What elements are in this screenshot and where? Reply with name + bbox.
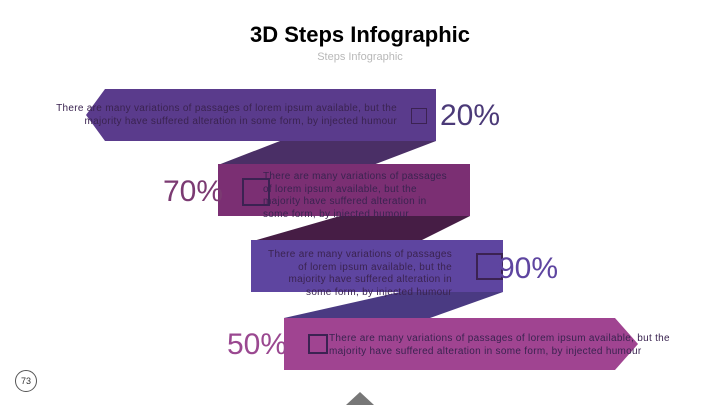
step 3 text: some form, by injected humour — [306, 286, 452, 298]
percent 20: 20% — [440, 99, 500, 132]
band 4 — [284, 318, 638, 370]
icon 3 — [476, 253, 503, 280]
icon 4 — [308, 334, 328, 354]
step 1 text: There are many variations of passages of lorem ipsum available, but the — [56, 103, 397, 114]
icon 2 — [242, 178, 270, 206]
band 3 — [251, 240, 503, 292]
page number: 73 — [21, 376, 31, 386]
icon 1 — [411, 108, 427, 124]
step 2 text: some form, by injected humour — [263, 208, 409, 220]
step 1 text: majority have suffered alteration in some form, by injected humour — [84, 116, 397, 126]
band 2 — [218, 164, 470, 216]
step 4 text: There are many variations of passages of lorem ipsum available, but the — [329, 333, 670, 344]
page number — [15, 370, 37, 392]
twist 2 — [253, 216, 470, 241]
step 3 text — [268, 249, 452, 298]
step 3 text: of lorem ipsum available, but the — [298, 262, 452, 272]
step 2 text: majority have suffered alteration in — [263, 196, 426, 207]
title: 3D Steps Infographic — [250, 22, 470, 47]
twist 3 — [284, 292, 503, 318]
step 2 text: of lorem ipsum available, but the — [263, 184, 417, 194]
percent 70: 70% — [163, 175, 223, 208]
triangle bottom — [346, 392, 374, 405]
twist 1 — [218, 141, 436, 165]
percent 90: 90% — [498, 252, 558, 285]
step 1 text — [56, 103, 397, 126]
band 1 — [86, 89, 436, 141]
step 2 text: There are many variations of passages — [263, 171, 447, 182]
step 3 text: majority have suffered alteration in — [289, 274, 452, 285]
percent 50: 50% — [227, 328, 287, 361]
step 4 text — [329, 333, 670, 356]
step 2 text — [263, 171, 447, 220]
step 4 text: majority have suffered alteration in some form, by injected humour — [329, 346, 642, 356]
step 3 text: There are many variations of passages — [268, 249, 452, 260]
subtitle: Steps Infographic — [317, 51, 403, 63]
